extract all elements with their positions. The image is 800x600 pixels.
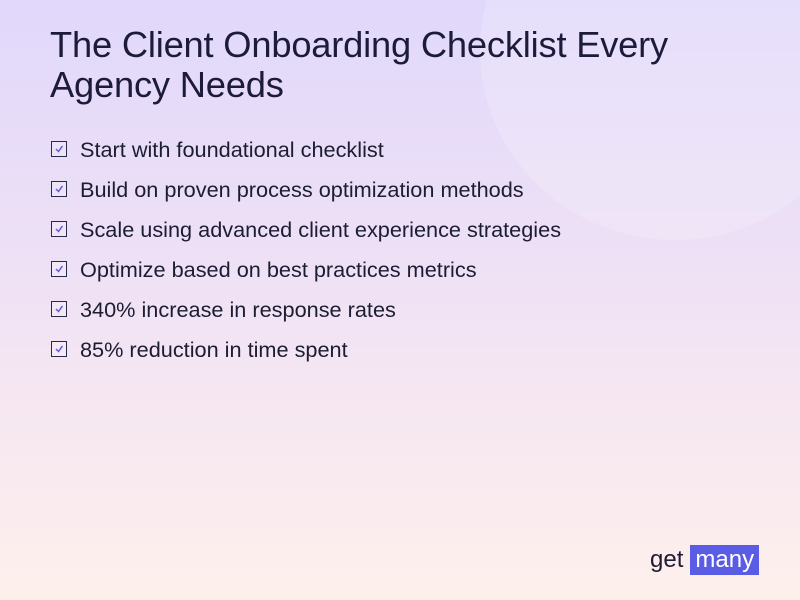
item 4: Optimize based on best practices metrics — [80, 257, 477, 282]
item 2: Build on proven process optimization methods — [80, 177, 524, 202]
title — [50, 24, 668, 105]
item 3: Scale using advanced client experience strategies — [80, 217, 561, 242]
item 1: Start with foundational checklist — [80, 137, 384, 162]
title: Agency Needs — [50, 64, 284, 105]
checklist — [51, 137, 561, 362]
logo — [650, 545, 759, 575]
item 6: 85% reduction in time spent — [80, 337, 348, 362]
logo: many — [695, 546, 754, 573]
title: The Client Onboarding Checklist Every — [50, 24, 668, 65]
item 5: 340% increase in response rates — [80, 297, 396, 322]
logo: get — [650, 546, 683, 573]
